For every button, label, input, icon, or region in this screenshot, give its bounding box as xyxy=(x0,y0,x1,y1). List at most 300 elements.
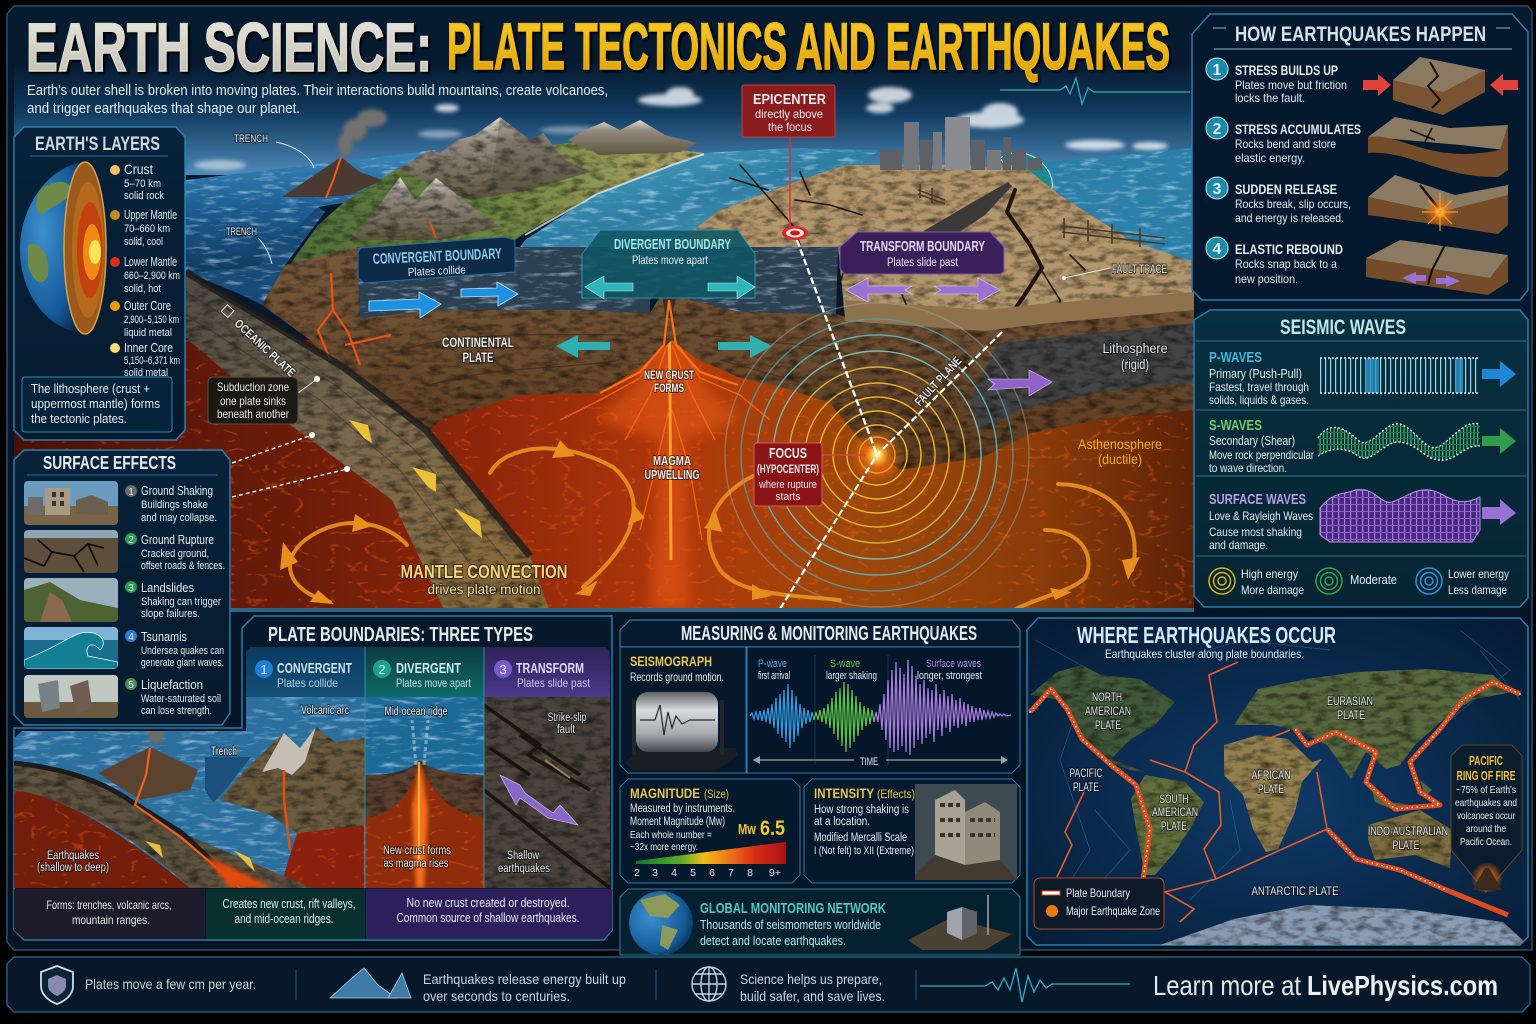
lithosphere label xyxy=(1102,340,1168,372)
outer core entry: 2,900–5,150 km xyxy=(124,314,179,326)
step 4 text: Rocks snap back to a xyxy=(1235,257,1337,271)
plate labels: INDO-AUSTRALIAN xyxy=(1368,824,1448,838)
seismogram surface-wave trace xyxy=(874,660,1011,755)
global monitoring network cell: GLOBAL MONITORING NETWORK xyxy=(700,900,886,917)
s-waves text: to wave direction. xyxy=(1209,461,1287,475)
network grid xyxy=(1035,630,1520,930)
step 2 text: Rocks bend and store xyxy=(1235,137,1336,151)
divergent boundary sign: DIVERGENT BOUNDARY xyxy=(614,236,731,253)
s-waves text xyxy=(1209,417,1314,475)
convergent caption xyxy=(14,889,205,939)
epicenter callout: directly above xyxy=(755,107,823,121)
continental plate label xyxy=(442,335,514,365)
continental crust xyxy=(262,247,1194,470)
dashed line epicenter to focus xyxy=(797,240,877,455)
divergent column header: Plates move apart xyxy=(396,676,472,690)
asthenosphere label xyxy=(1078,436,1162,467)
crust entry xyxy=(110,162,164,202)
s-waves text: S-WAVES xyxy=(1209,417,1262,434)
earthquake dots along boundaries xyxy=(1030,682,1520,889)
step 2 text: STRESS ACCUMULATES xyxy=(1235,121,1361,137)
footer fact: energy: Earthquakes release energy built up xyxy=(423,971,626,987)
lower mantle entry: Lower Mantle xyxy=(124,255,177,269)
effect text: tsunamis: 4 xyxy=(128,632,134,643)
footer bar xyxy=(7,957,1530,1012)
world map xyxy=(1030,630,1528,945)
heading rule xyxy=(1213,28,1512,49)
plate labels: AMERICAN xyxy=(1152,805,1198,819)
step 4 text xyxy=(1206,237,1343,286)
step 2 text: elastic energy. xyxy=(1235,151,1305,165)
magma upwelling label: MAGMA xyxy=(653,453,691,468)
transform labels: Shallow xyxy=(507,850,540,862)
subduction zone callout: one plate sinks xyxy=(220,394,286,408)
heading rule xyxy=(30,155,168,157)
seismograph drum xyxy=(625,692,738,770)
divergent labels: as magma rises xyxy=(384,858,449,870)
panel: how earthquakes happen xyxy=(1192,14,1528,300)
seismic station xyxy=(908,895,1012,950)
clouds xyxy=(194,87,1168,170)
title: EARTH SCIENCE: xyxy=(26,9,432,86)
lithosphere label: (rigid) xyxy=(1121,356,1149,372)
coastal foam xyxy=(525,154,704,235)
transform caption xyxy=(366,889,612,939)
crust strata lines xyxy=(400,334,850,385)
focus starburst xyxy=(849,427,905,483)
convergent boundary sign: CONVERGENT BOUNDARY xyxy=(372,245,502,268)
p-waves text: Primary (Push-Pull) xyxy=(1209,367,1302,381)
fences xyxy=(918,184,1165,247)
scene bottom border xyxy=(14,608,1194,612)
plate labels: PLATE xyxy=(1392,838,1420,852)
trench wall xyxy=(186,207,325,305)
effect text: liquefaction xyxy=(125,678,221,717)
plate labels: SOUTH xyxy=(1160,792,1188,806)
legend: lower energy: Lower energy xyxy=(1448,567,1509,581)
effect text: liquefaction: Water-saturated soil xyxy=(141,693,221,705)
new crust label: FORMS xyxy=(654,383,684,395)
plate labels: NORTH xyxy=(1092,690,1122,704)
fault plane label: FAULT PLANE xyxy=(912,354,964,409)
legend: high energy: High energy xyxy=(1241,567,1298,581)
continent: eurasia xyxy=(1234,669,1513,779)
magnitude scale: 2 xyxy=(634,867,640,879)
effect text: ground rupture: Ground Rupture xyxy=(141,533,214,547)
lower mantle entry: 660–2,900 km xyxy=(124,270,180,282)
slab direction arrows xyxy=(349,420,482,538)
lower divergent arrows xyxy=(556,335,772,358)
sky xyxy=(14,72,1192,175)
ground cracks xyxy=(729,164,1086,316)
water cross section xyxy=(357,247,838,318)
focus callout: FOCUS xyxy=(769,445,807,462)
footer fact: science: Science helps us prepare, xyxy=(740,971,882,987)
step 1 text: 1 xyxy=(1213,62,1222,79)
continent: antarctica xyxy=(1160,905,1528,945)
seismograph cell: Records ground motion. xyxy=(630,670,724,684)
divergent labels xyxy=(383,706,451,870)
subheading: Earthquakes cluster along plate boundaries. xyxy=(1105,647,1304,661)
intensity cell: Modified Mercalli Scale xyxy=(814,832,907,844)
lithosphere note: uppermost mantle) forms xyxy=(31,397,160,411)
main mountain shadow side xyxy=(490,117,590,190)
inner core entry: 5,150–6,371 km xyxy=(124,355,180,367)
convergent labels: Volcanic arc xyxy=(301,705,349,717)
call to action: Learn more at xyxy=(1153,970,1301,1001)
dashed leaders from surface effects xyxy=(232,432,350,497)
magnitude scale: 3 xyxy=(652,867,658,879)
p-waves text: solids, liquids & gases. xyxy=(1209,393,1309,407)
seismogram cell: first arrival xyxy=(758,670,790,682)
lithosphere note xyxy=(22,377,172,432)
continent: north america xyxy=(1030,665,1175,772)
intensity cell: How strong shaking is xyxy=(814,804,909,816)
effect text: tsunamis: Tsunamis xyxy=(141,630,187,644)
step 2 text: 2 xyxy=(1213,121,1222,138)
effect text: ground shaking: 1 xyxy=(128,487,134,498)
pacific ring of fire callout: earthquakes and xyxy=(1455,797,1517,809)
heading: WHERE EARTHQUAKES OCCUR xyxy=(1077,622,1336,648)
mw value: Mw xyxy=(738,821,756,838)
time axis xyxy=(753,756,1008,768)
effect text: landslides: Shaking can trigger xyxy=(141,596,221,608)
crust entry: solid rock xyxy=(124,190,164,202)
globe icon xyxy=(692,967,726,1001)
s-waves text: Move rock perpendicular xyxy=(1209,448,1314,462)
focus callout: starts xyxy=(776,491,801,503)
intensity cell: at a location. xyxy=(814,816,870,828)
grey lithosphere band xyxy=(970,323,1194,430)
plate labels: PLATE xyxy=(1073,780,1099,794)
main mountain range xyxy=(397,117,590,200)
magnitude cell: (Size) xyxy=(704,787,729,801)
legend: moderate: Moderate xyxy=(1350,573,1397,587)
crust entry: Crust xyxy=(124,162,153,177)
step 1 text: STRESS BUILDS UP xyxy=(1235,62,1338,78)
intensity cell: INTENSITY xyxy=(814,785,875,801)
volcano lava xyxy=(326,157,341,198)
lithosphere note: the tectonic plates. xyxy=(31,412,127,426)
magnitude scale: 6 xyxy=(709,867,715,879)
left ocean xyxy=(186,150,436,272)
tsunami wave xyxy=(1001,152,1053,189)
outer core entry: liquid metal xyxy=(124,327,172,339)
divergent labels: Mid-ocean ridge xyxy=(384,706,448,718)
central tectonic scene xyxy=(14,60,1194,612)
map legend: Plate Boundary xyxy=(1066,886,1130,900)
convergent labels: (shallow to deep) xyxy=(37,862,109,874)
panel: earth's layers xyxy=(14,127,185,440)
effect text: ground rupture: offset roads & fences. xyxy=(141,560,225,572)
transform labels xyxy=(498,712,586,875)
plume veins xyxy=(560,330,770,540)
convergent labels: Trench xyxy=(211,746,237,758)
step 3 block diagram xyxy=(1368,175,1508,234)
focus callout xyxy=(754,443,866,506)
footer fact: science xyxy=(740,971,885,1004)
divergent labels: New crust forms xyxy=(383,845,451,857)
mantle convection label xyxy=(400,562,568,597)
mw value xyxy=(738,817,785,840)
thumbnail: ground shaking xyxy=(24,481,118,525)
magnitude scale: 8 xyxy=(747,867,753,879)
transform caption: No new crust created or destroyed. xyxy=(406,896,570,910)
lower mantle entry: solid, hot xyxy=(124,283,161,295)
step 4 text: ELASTIC REBOUND xyxy=(1235,241,1343,257)
effect text: landslides xyxy=(125,581,221,620)
convergent caption: mountain ranges. xyxy=(72,913,150,927)
magma upwelling label: UPWELLING xyxy=(644,467,700,482)
seismogram cell xyxy=(747,647,1020,773)
magnitude cell: Moment Magnitude (Mw) xyxy=(630,816,725,828)
magnitude scale: 9+ xyxy=(769,867,781,879)
surface waves text: Cause most shaking xyxy=(1209,525,1302,539)
step 3 text: SUDDEN RELEASE xyxy=(1235,181,1337,197)
effect text: tsunamis: Undersea quakes can xyxy=(141,645,224,657)
panel: plate boundaries xyxy=(14,616,612,940)
transform boundary sign: TRANSFORM BOUNDARY xyxy=(860,238,985,255)
intensity cell: I (Not felt) to XII (Extreme) xyxy=(814,845,914,857)
slab banding xyxy=(186,292,510,570)
seismic wave rings xyxy=(725,303,1029,607)
effect text: ground rupture: Cracked ground, xyxy=(141,548,209,560)
transform column header xyxy=(484,647,610,697)
panel: where earthquakes occur xyxy=(1027,618,1528,945)
fault trace label xyxy=(1062,264,1167,280)
effect text: liquefaction: can lose strength. xyxy=(141,705,212,717)
lithosphere label: Lithosphere xyxy=(1102,340,1168,356)
map legend xyxy=(1034,878,1164,929)
legend: high energy xyxy=(1209,567,1304,597)
divergent illustration xyxy=(365,697,484,888)
p-waves text: Fastest, travel through xyxy=(1209,380,1309,394)
scene labels xyxy=(208,85,1168,597)
effect text: landslides: Landslides xyxy=(141,581,194,595)
transform column header: TRANSFORM xyxy=(516,660,584,677)
divergent caption: Creates new crust, rift valleys, xyxy=(222,897,356,911)
ring of fire volcano xyxy=(1471,862,1503,894)
seismogram s-wave trace xyxy=(814,682,874,752)
convergent column header: 1 xyxy=(260,662,268,677)
magnitude scale: 4 xyxy=(671,867,677,879)
fault plane dashed line xyxy=(778,332,1002,612)
magnitude scale xyxy=(634,867,781,879)
global monitoring network cell: detect and locate earthquakes. xyxy=(700,934,846,948)
transform column header: Plates slide past xyxy=(517,676,591,690)
intensity cell xyxy=(804,779,1020,883)
convergent column header: CONVERGENT xyxy=(277,660,352,677)
effect text: ground rupture xyxy=(125,533,225,572)
divergent boundary sign xyxy=(582,230,755,298)
asthenosphere label: Asthenosphere xyxy=(1078,436,1162,452)
legend: lower energy: Less damage xyxy=(1448,583,1507,597)
surface wave diagram xyxy=(1320,489,1516,542)
convection arrows xyxy=(290,448,1135,612)
seismogram p-wave trace xyxy=(750,684,814,748)
major boundary glow xyxy=(1030,682,1520,915)
sand ground front edge xyxy=(845,292,1194,331)
magnitude bar xyxy=(636,842,786,864)
p-waves text: P-WAVES xyxy=(1209,349,1262,366)
magnitude cell: MAGNITUDE xyxy=(630,785,700,801)
rift lava xyxy=(600,300,738,393)
transform column header: 3 xyxy=(499,662,507,677)
mid ocean ridge crest xyxy=(661,278,677,318)
magnitude scale: 5 xyxy=(690,867,696,879)
section rules xyxy=(1196,341,1526,556)
step 4 text: new position. xyxy=(1235,272,1298,286)
footer fact: science: build safer, and save lives. xyxy=(740,988,885,1004)
step 4 block diagram xyxy=(1366,240,1508,295)
far coastal land xyxy=(290,142,704,264)
oceanic plate label xyxy=(219,304,298,380)
inner core entry xyxy=(110,341,180,379)
magnitude cell xyxy=(620,779,800,883)
step 3 text: Rocks break, slip occurs, xyxy=(1235,197,1351,211)
plate labels: PLATE xyxy=(1095,718,1121,732)
legend: high energy: More damage xyxy=(1241,583,1304,597)
plate labels: EURASIAN xyxy=(1327,694,1373,708)
thin plate boundaries xyxy=(1057,662,1327,922)
time axis: TIME xyxy=(860,756,878,768)
epicenter callout: EPICENTER xyxy=(753,91,826,108)
slab top shadow xyxy=(186,272,530,556)
epicenter callout xyxy=(742,85,835,240)
transform caption: Common source of shallow earthquakes. xyxy=(396,911,580,925)
surface waves text: SURFACE WAVES xyxy=(1209,491,1306,508)
surface waves text: Love & Rayleigh Waves xyxy=(1209,509,1313,523)
step 3 text: 3 xyxy=(1213,181,1222,198)
seismogram cell: P-wave xyxy=(758,658,787,670)
transform boundary sign: Plates slide past xyxy=(887,257,959,269)
cracked sand ground xyxy=(670,165,1192,327)
islands xyxy=(1372,780,1432,812)
effect text: ground shaking: Ground Shaking xyxy=(141,484,213,498)
pacific ring of fire callout: around the xyxy=(1466,823,1506,835)
right sea xyxy=(1042,148,1192,262)
transform labels: Strike-slip xyxy=(548,712,586,724)
divergent caption: and mid-ocean ridges. xyxy=(234,912,334,926)
volcano xyxy=(282,157,382,197)
surface waves text xyxy=(1209,491,1313,552)
heading: SURFACE EFFECTS xyxy=(43,453,176,473)
plate labels: PLATE xyxy=(1337,708,1365,722)
divergent arrows xyxy=(585,276,755,299)
step 1 text: Plates move but friction xyxy=(1235,78,1347,92)
subduction zone callout: beneath another xyxy=(217,407,289,421)
decorative heartbeat xyxy=(1000,78,1190,104)
panel: surface effects xyxy=(14,450,230,725)
thumbnail: landslides xyxy=(24,578,118,622)
damaged building xyxy=(910,784,1017,880)
step 3 text xyxy=(1206,177,1351,225)
continental plate label: PLATE xyxy=(462,350,494,365)
continent: africa xyxy=(1224,735,1322,852)
epicenter callout: the focus xyxy=(768,120,812,134)
divergent column header xyxy=(365,647,484,697)
pacific ring of fire callout: ~75% of Earth's xyxy=(1456,784,1516,796)
mantle xyxy=(14,340,1194,612)
convergent illustration xyxy=(14,697,365,888)
title xyxy=(26,9,1170,86)
legend: lower energy xyxy=(1416,567,1509,597)
oceanic plate label: OCEANIC PLATE xyxy=(232,316,298,380)
step 4 text: 4 xyxy=(1213,241,1222,258)
plate labels: AFRICAN xyxy=(1252,768,1290,782)
seismograph cell xyxy=(620,647,746,773)
divergent caption xyxy=(206,889,365,939)
lower mantle entry xyxy=(110,255,180,295)
global monitoring network cell: Thousands of seismometers worldwide xyxy=(700,918,881,932)
upper mantle entry: Upper Mantle xyxy=(124,208,177,222)
continent: south america xyxy=(1131,775,1204,875)
convergent column header: Plates collide xyxy=(277,676,338,690)
thumbnail: liquefaction xyxy=(24,675,118,718)
step 1 block diagram xyxy=(1363,57,1518,115)
footer dividers xyxy=(296,970,916,1000)
s-wave diagram xyxy=(1318,418,1516,468)
inner core entry: solid metal xyxy=(124,367,168,379)
trench leader lines xyxy=(258,142,314,264)
arc lava streak xyxy=(430,222,436,238)
thumbnail: tsunami xyxy=(24,627,118,669)
globe cutaway xyxy=(20,162,106,334)
continental plate label: CONTINENTAL xyxy=(442,335,514,350)
plume core xyxy=(669,290,671,560)
p-waves text xyxy=(1209,349,1309,407)
inner core entry: Inner Core xyxy=(124,341,173,355)
seismogram cell: longer, strongest xyxy=(917,670,982,682)
transform labels: fault xyxy=(557,724,576,736)
step 3 text: and energy is released. xyxy=(1235,211,1344,225)
step 1 text xyxy=(1206,58,1347,105)
mw value: 6.5 xyxy=(760,817,785,840)
footer fact: energy: over seconds to centuries. xyxy=(423,988,570,1004)
seismogram cell: larger shaking xyxy=(826,670,877,682)
seismogram cell: S-wave xyxy=(830,658,860,670)
effect text: landslides: slope failures. xyxy=(141,608,200,620)
intensity cell: (Effects) xyxy=(877,787,915,801)
surface waves text: and damage. xyxy=(1209,538,1268,552)
plate labels: PACIFIC xyxy=(1070,766,1103,780)
step 1 text: locks the fault. xyxy=(1235,91,1305,105)
city skyline xyxy=(880,117,1042,170)
convergent column header xyxy=(246,647,365,697)
heading: SEISMIC WAVES xyxy=(1280,316,1406,339)
trench label lower: TRENCH xyxy=(226,226,257,238)
effect text: tsunamis: generate giant waves. xyxy=(141,657,224,669)
footer fact: plates: Plates move a few cm per year. xyxy=(85,976,256,992)
subduction zone callout xyxy=(208,376,320,424)
subtitle xyxy=(27,82,608,117)
transform labels: earthquakes xyxy=(498,863,550,875)
focus callout: where rupture xyxy=(758,479,817,491)
heading: MEASURING & MONITORING EARTHQUAKES xyxy=(681,623,977,645)
global monitoring network cell xyxy=(620,889,1020,955)
heading rule xyxy=(27,474,218,476)
pacific ring of fire callout: volcanoes occur xyxy=(1457,810,1515,822)
lower transform arrow xyxy=(988,370,1052,396)
magma plume xyxy=(598,340,738,608)
divergent column header: 2 xyxy=(378,662,386,677)
convergent boundary sign xyxy=(358,237,515,283)
thumbnail: ground rupture xyxy=(24,530,118,573)
shield icon xyxy=(41,966,73,1004)
upper mantle entry: solid, cool xyxy=(124,236,163,248)
outer core entry: Outer Core xyxy=(124,299,171,313)
convection arrowheads xyxy=(280,440,1140,604)
